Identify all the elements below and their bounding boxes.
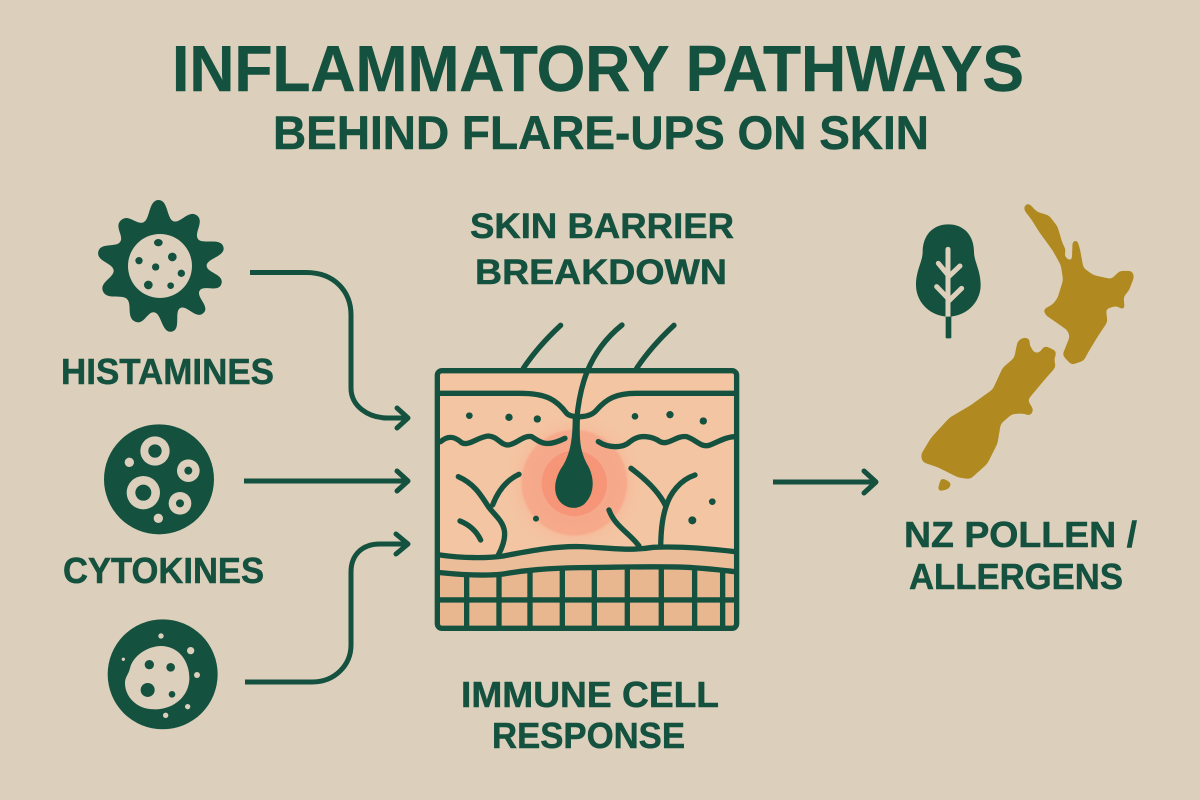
icon: histamines gear cell: [98, 200, 224, 332]
hairs: [523, 325, 674, 420]
label: NZ pollen / allergens: NZ POLLEN /: [904, 514, 1137, 555]
diagram: skin cross-section: [437, 325, 737, 630]
fat cell grid: [438, 567, 735, 628]
label: immune cell response: IMMUNE CELL: [461, 674, 719, 715]
dermis boundary: [440, 547, 735, 558]
label: skin barrier breakdown: [470, 207, 734, 292]
fat boundary: [440, 567, 735, 575]
icon: tree: [916, 224, 981, 338]
icon: immune cell: [108, 619, 218, 729]
epidermis line: [440, 393, 735, 417]
label: histamines: HISTAMINES: [61, 351, 274, 392]
icon: cytokines cell cluster: [104, 424, 214, 534]
inflammation glow: [520, 428, 628, 537]
label: NZ pollen / allergens: ALLERGENS: [909, 556, 1123, 597]
centre vessel: [609, 510, 639, 546]
box outline: [437, 371, 737, 628]
label: immune cell response: RESPONSE: [492, 715, 685, 756]
left vessels: [458, 474, 519, 555]
hair follicle: [555, 418, 593, 508]
subtitle: BEHIND FLARE-UPS ON SKIN: [273, 106, 929, 159]
arrow: skin to NZ pollen: [773, 471, 876, 493]
label: cytokines: CYTOKINES: [63, 550, 264, 591]
label: skin barrier breakdown: BREAKDOWN: [475, 253, 727, 292]
right vessels: [631, 468, 695, 547]
title: INFLAMMATORY PATHWAYS: [172, 32, 1024, 105]
label: immune cell response: [461, 674, 719, 756]
label: NZ pollen / allergens: [904, 514, 1137, 597]
stewart island: [938, 479, 951, 491]
arrow: cytokines to skin: [244, 471, 408, 491]
wavy layer right: [598, 436, 735, 447]
layer: fat tissue: [440, 570, 734, 626]
north island: [1025, 204, 1133, 364]
south island: [922, 338, 1056, 478]
arrow: histamines to skin: [250, 272, 408, 428]
wavy layer left: [441, 436, 565, 445]
label: skin barrier breakdown: SKIN BARRIER: [470, 207, 734, 246]
infographic canvas: [63, 45, 1137, 748]
map: New Zealand: [922, 204, 1133, 491]
skin cell dots: [466, 411, 716, 524]
layer: lower dermis band: [440, 550, 734, 572]
arrow: immune cell to skin: [245, 534, 408, 682]
